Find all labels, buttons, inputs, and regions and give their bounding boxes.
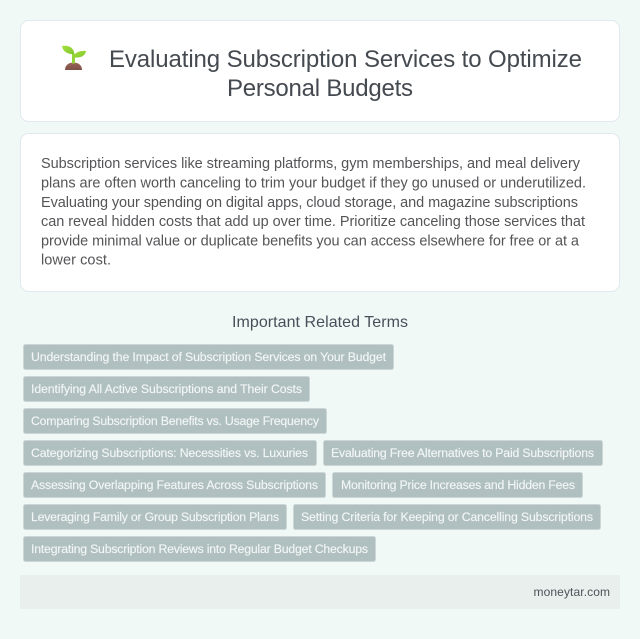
- panel: title card: [20, 20, 620, 122]
- icon: seedling: [62, 46, 86, 70]
- heading: related terms: Important Related Terms: [232, 314, 408, 331]
- tag: [24, 504, 286, 530]
- tag: [24, 376, 310, 402]
- description text: can reveal hidden costs that add up over time. Prioritize canceling those services that: [41, 214, 585, 230]
- tag: Identifying All Active Subscriptions and Their Costs: [31, 382, 302, 396]
- tag: [24, 472, 326, 498]
- tag: Setting Criteria for Keeping or Cancelling Subscriptions: [301, 510, 593, 524]
- tag: Categorizing Subscriptions: Necessities vs. Luxuries: [31, 446, 308, 460]
- tag: Assessing Overlapping Features Across Subscriptions: [31, 478, 318, 492]
- description text: plans are often worth canceling to trim your budget if they go unused or underutilized.: [41, 176, 586, 192]
- tag: Leveraging Family or Group Subscription Plans: [31, 510, 279, 524]
- tag: Comparing Subscription Benefits vs. Usage Frequency: [31, 414, 320, 428]
- tag: [24, 408, 326, 434]
- tag: [294, 504, 600, 530]
- title: Personal Budgets: [227, 75, 413, 102]
- tag: [24, 344, 394, 370]
- tag: [24, 440, 316, 466]
- tag list: related terms: [24, 344, 602, 562]
- footer bar: [20, 575, 620, 609]
- tag: [24, 536, 376, 562]
- tag: Understanding the Impact of Subscription Services on Your Budget: [31, 350, 387, 364]
- title: Evaluating Subscription Services to Optimize: [109, 46, 582, 73]
- title: [109, 46, 582, 102]
- tag: [332, 472, 582, 498]
- tag: Monitoring Price Increases and Hidden Fees: [341, 478, 575, 492]
- description text: Evaluating your spending on digital apps, cloud storage, and magazine subscriptions: [41, 195, 578, 211]
- tag: [324, 440, 602, 466]
- description text: provide minimal value or duplicate benefits you can access elsewhere for free or at a: [41, 234, 580, 250]
- description text: lower cost.: [41, 252, 111, 268]
- tag: Integrating Subscription Reviews into Regular Budget Checkups: [31, 542, 368, 556]
- description text: Subscription services like streaming platforms, gym memberships, and meal delivery: [41, 156, 581, 172]
- tag: Evaluating Free Alternatives to Paid Subscriptions: [331, 446, 594, 460]
- footer source text: moneytar.com: [534, 585, 610, 599]
- panel: description card: [20, 134, 620, 292]
- description text: [41, 156, 586, 268]
